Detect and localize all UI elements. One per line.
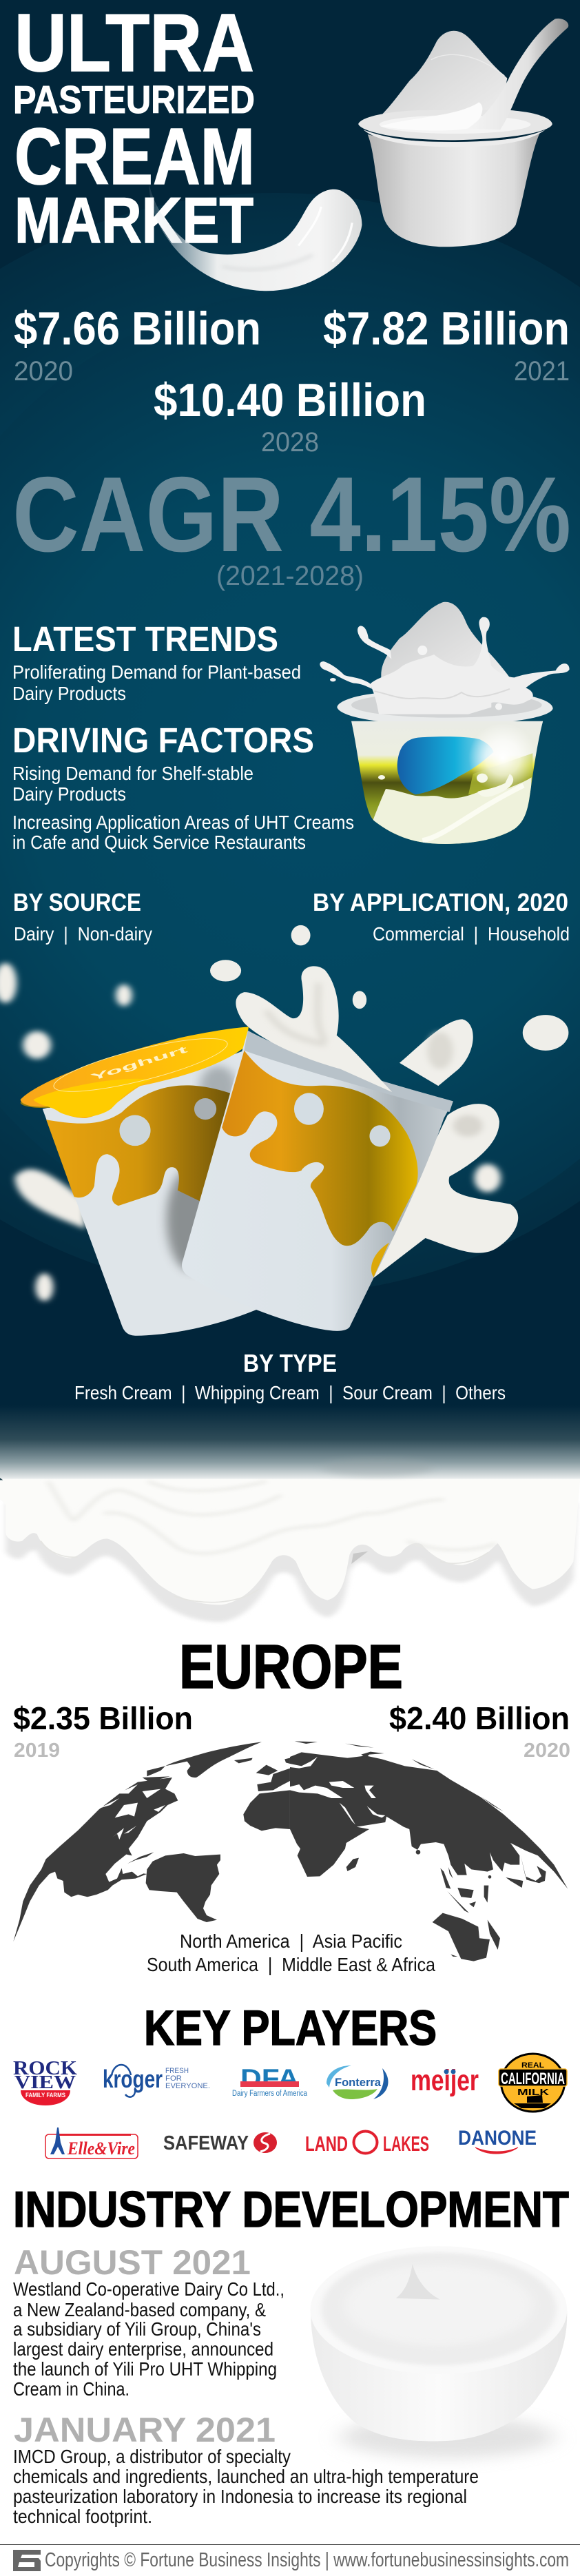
stat: 2019: $2.35 Billion	[13, 1700, 193, 1736]
left cup	[21, 1027, 259, 1336]
blurred milk droplets	[0, 963, 501, 1301]
logo: Kroger: kroger	[103, 2065, 163, 2093]
world map globe	[13, 1741, 568, 1961]
logo: Safeway: SAFEWAY	[163, 2132, 249, 2154]
logo: Kroger	[103, 2065, 210, 2097]
right cup	[182, 1031, 453, 1331]
stat: 2028 market size	[154, 374, 426, 457]
stat: 2020: 2020	[524, 1740, 570, 1762]
illustration: cream bowl	[311, 2246, 567, 2458]
by type: BY TYPE	[243, 1349, 337, 1377]
title: CREAM	[14, 112, 255, 201]
by source: BY SOURCE	[13, 888, 141, 916]
development: August 2021: AUGUST 2021	[14, 2243, 251, 2282]
logo: Rockview: ROCK	[13, 2057, 77, 2079]
development: January 2021	[13, 2411, 479, 2527]
stat: 2028 market size: $10.40 Billion	[154, 374, 426, 426]
development: January 2021: chemicals and ingredients, launched an ultra-high temperature	[13, 2466, 479, 2487]
by application	[313, 888, 570, 945]
title: MARKET	[14, 184, 253, 256]
title: PASTEURIZED	[13, 78, 255, 122]
illustration: dripping cream	[0, 1459, 580, 1622]
development: January 2021: IMCD Group, a distributor of specialty	[13, 2446, 291, 2467]
logo: Land O Lakes	[305, 2132, 429, 2156]
by source: Dairy | Non-dairy	[14, 923, 152, 945]
stat: 2020 market size: 2020	[14, 356, 73, 387]
logo: Kroger: FOR	[165, 2074, 182, 2083]
logo: Kroger: FRESH	[165, 2067, 189, 2075]
illustration: cream swoosh	[149, 184, 362, 291]
region list: North America | Asia Pacific	[180, 1930, 402, 1952]
stat: 2020 market size	[14, 302, 261, 387]
development: January 2021: technical footprint.	[13, 2506, 152, 2527]
latest trends text: Dairy Products	[12, 683, 126, 704]
region list	[147, 1930, 435, 1975]
illustration: splash cup	[320, 602, 570, 845]
stat: 2020 market size: $7.66 Billion	[14, 302, 261, 355]
development: August 2021: Westland Co-operative Dairy Co Ltd.,	[13, 2278, 284, 2300]
development: August 2021: a New Zealand-based company, &	[13, 2299, 266, 2320]
sharp droplets	[210, 925, 568, 1051]
development: August 2021: largest dairy enterprise, announced	[13, 2338, 273, 2360]
by source	[13, 888, 152, 945]
key players heading: KEY PLAYERS	[144, 2001, 437, 2056]
driving factors text	[12, 721, 354, 853]
title	[13, 0, 255, 256]
logo: Meijer: meijer	[411, 2064, 479, 2097]
development: August 2021: a subsidiary of Yili Group, China's	[13, 2318, 261, 2340]
development: January 2021: pasteurization laboratory in Indonesia to increase its regional	[13, 2486, 467, 2507]
logo: Rockview: VIEW	[14, 2072, 76, 2092]
logo: Rockview	[13, 2057, 77, 2105]
driving factors text: Dairy Products	[12, 783, 126, 805]
development: August 2021: Cream in China.	[13, 2378, 130, 2400]
stat: 2028 market size: 2028	[261, 427, 319, 457]
stat: 2019: 2019	[14, 1740, 60, 1762]
stat: 2020	[389, 1700, 570, 1762]
driving factors text: Increasing Application Areas of UHT Creams	[12, 812, 354, 833]
development: August 2021	[13, 2243, 284, 2400]
illustration: cream cup with spoon	[358, 19, 568, 247]
logo: Real California Milk	[499, 2054, 567, 2112]
logo: Fonterra: Fonterra	[335, 2076, 382, 2089]
illustration: yoghurt cups and milk splash	[0, 925, 568, 1336]
development: January 2021: JANUARY 2021	[14, 2411, 276, 2449]
left cup: Yoghurt	[90, 1044, 189, 1083]
latest trends text: LATEST TRENDS	[12, 619, 278, 659]
logo: Elle & Vire: Elle&Vire	[67, 2139, 135, 2158]
logo: Dairy Farmers of America: Dairy Farmers of America	[232, 2090, 308, 2098]
milk splash over cup	[236, 966, 392, 1092]
logo: Rockview: FAMILY FARMS	[25, 2092, 65, 2099]
latest trends text	[12, 619, 301, 704]
latest trends text: Proliferating Demand for Plant-based	[12, 661, 301, 683]
stat: 2020: $2.40 Billion	[389, 1700, 570, 1736]
stat: 2021 market size: 2021	[514, 356, 570, 387]
stat: 2021 market size	[323, 302, 570, 387]
logo: Dairy Farmers of America	[232, 2064, 308, 2098]
region list: South America | Middle East & Africa	[147, 1954, 435, 1975]
logo: Real California Milk: MILK	[517, 2087, 550, 2097]
logo: Land O Lakes: LAND	[305, 2132, 348, 2156]
driving factors text: Rising Demand for Shelf-stable	[12, 763, 253, 784]
development: August 2021: the launch of Yili Pro UHT Whipping	[13, 2358, 277, 2380]
CAGR stat: (2021-2028)	[216, 561, 364, 591]
dark navy background	[0, 0, 580, 1481]
driving factors text: in Cafe and Quick Service Restaurants	[12, 832, 306, 853]
by type	[74, 1349, 506, 1403]
logo: Fonterra	[327, 2065, 389, 2099]
footer logo	[13, 2550, 41, 2571]
by type: Fresh Cream | Whipping Cream | Sour Cream | Others	[74, 1382, 506, 1403]
logo: Real California Milk: REAL	[521, 2061, 544, 2070]
by application: BY APPLICATION, 2020	[313, 888, 568, 916]
regional heading: EUROPE	[179, 1633, 403, 1702]
logo: Danone: DANONE	[458, 2127, 537, 2150]
logo: Elle & Vire	[45, 2127, 138, 2158]
driving factors text: DRIVING FACTORS	[12, 721, 314, 760]
logo: Kroger: EVERYONE.	[165, 2082, 210, 2090]
stat: 2019	[13, 1700, 193, 1762]
milk splash behind cups	[373, 1019, 518, 1278]
logo: Dairy Farmers of America: DFA	[240, 2064, 299, 2092]
logo: Land O Lakes: LAKES	[383, 2132, 429, 2156]
